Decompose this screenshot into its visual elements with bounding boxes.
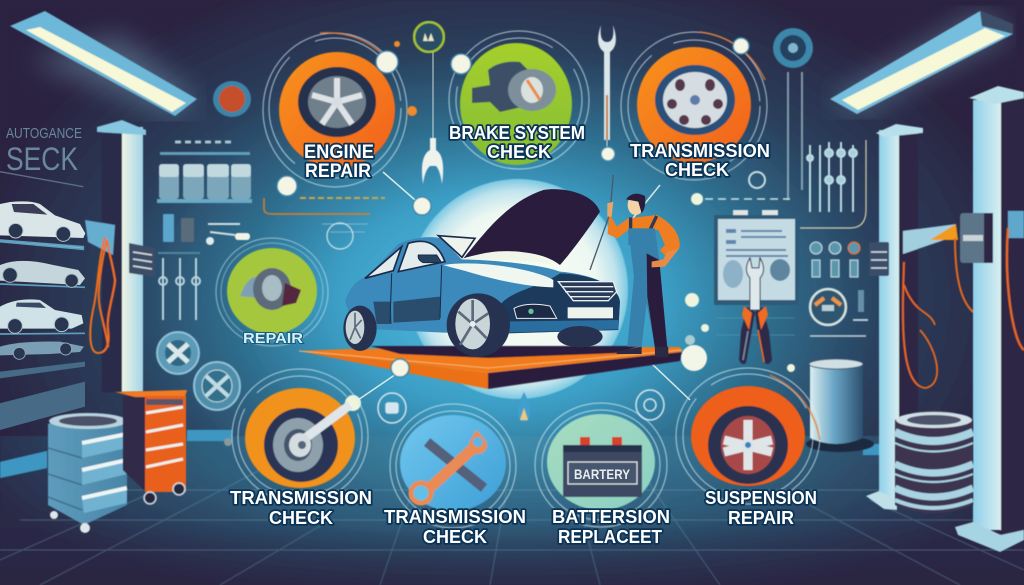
front wheel — [447, 293, 510, 357]
lower left disc and wrench on wheel — [245, 388, 355, 488]
showroom cars rack — [0, 172, 85, 430]
battery rings — [535, 403, 667, 527]
car dark lower body — [497, 273, 620, 333]
lower left rings — [232, 369, 368, 503]
rear wheel — [343, 306, 377, 351]
engine bay — [465, 251, 552, 264]
panel: transmission check top — [621, 32, 770, 180]
right ceiling light — [830, 11, 1013, 114]
brake rings — [449, 31, 589, 169]
mechanic shirt and arms — [608, 213, 680, 257]
brake system label: BRAKE SYSTEM — [449, 123, 585, 143]
engine repair rings — [263, 33, 407, 187]
orbit dots top — [277, 38, 749, 215]
far wheel — [557, 326, 603, 347]
icon: top wrench — [598, 25, 616, 140]
car body — [345, 237, 620, 333]
left lift pillar — [85, 120, 155, 392]
lower middle rings — [390, 404, 516, 528]
connector lines — [355, 42, 690, 402]
lower middle label: TRANSMISSION — [384, 507, 526, 527]
windshield — [438, 236, 475, 257]
rack car 2 — [0, 261, 85, 287]
icon: dark gauge top right — [773, 28, 813, 68]
lower middle label: CHECK — [423, 527, 487, 547]
hanging tools left — [158, 253, 200, 320]
transmission label: CHECK — [665, 160, 729, 180]
wall sign — [6, 125, 82, 177]
mirror and door lines — [390, 255, 442, 323]
platform dots — [224, 293, 795, 446]
repair rings and disc — [216, 238, 328, 346]
battery label: REPLACEET — [558, 527, 662, 547]
panel: transmission check lower middle — [384, 404, 526, 547]
left ceiling light — [10, 11, 197, 116]
engine repair label: REPAIR — [305, 161, 371, 182]
icon: hanging wrench center — [422, 138, 443, 184]
transmission label: TRANSMISSION — [630, 141, 770, 161]
engine repair label — [304, 142, 374, 182]
panel: engine repair — [263, 33, 407, 187]
battery label: BATTERSION — [552, 507, 670, 527]
right lift pillar far — [955, 86, 1024, 552]
mechanic head — [628, 195, 644, 215]
rack car 3 — [0, 299, 83, 333]
suspension label: SUSPENSION — [705, 488, 817, 508]
mechanic figure — [607, 194, 680, 357]
icon: small rings and drop bottom — [378, 390, 664, 423]
battery disc and icon — [547, 414, 655, 510]
dipstick — [590, 175, 613, 270]
transmission disc and wheel — [637, 47, 751, 163]
brake system label — [449, 123, 585, 162]
lift platform — [299, 346, 682, 389]
battery text on icon: BARTERY — [574, 466, 631, 482]
open hood — [463, 189, 600, 265]
rolling blue tool cart — [48, 413, 127, 533]
small wall decorations — [264, 172, 790, 249]
panel: suspension repair — [676, 368, 820, 528]
lower left label — [230, 488, 372, 528]
icon: red gauge left — [213, 81, 251, 117]
grille — [558, 282, 617, 301]
icon: wheel badge left lower — [194, 362, 240, 410]
panel: repair small — [216, 238, 328, 347]
icon: wheel badge left upper — [157, 332, 199, 374]
repair label: REPAIR — [243, 330, 303, 347]
car with open hood — [343, 175, 620, 357]
suspension label — [705, 488, 817, 528]
icon: green ring badge — [414, 22, 444, 52]
engine repair disc and wheel — [279, 52, 395, 168]
right lift pillar near — [866, 124, 958, 510]
wall sign: AUTOGANCE — [6, 125, 82, 142]
lower middle label — [384, 507, 526, 547]
battery label — [552, 507, 670, 547]
lower middle disc and crossed wrenches — [400, 415, 506, 511]
transmission rings — [621, 32, 767, 180]
rack car 4 — [0, 342, 84, 359]
panel: transmission check lower left — [230, 369, 372, 528]
brake disc and caliper — [460, 43, 572, 165]
stacked tyres — [895, 410, 973, 514]
wall sign: SECK — [6, 141, 78, 177]
rack car 1 — [0, 201, 85, 241]
panel: brake system check — [449, 31, 589, 169]
suspension label: REPAIR — [728, 508, 794, 528]
wall shelf with bins — [157, 142, 252, 245]
mechanic hand and boots — [607, 202, 613, 217]
suspension disc and wheel — [691, 386, 805, 486]
bumper light and plate — [514, 304, 557, 318]
suspension rings — [676, 368, 820, 504]
hood highlight — [443, 263, 553, 287]
mechanic overalls — [627, 228, 667, 347]
car service clipboard — [714, 210, 799, 335]
central light burst — [408, 179, 628, 399]
icon: small gauge trio and steering — [810, 242, 868, 336]
brake system label: CHECK — [487, 142, 551, 162]
lower left label: CHECK — [269, 508, 333, 528]
icon: wrench and pliers — [739, 258, 772, 364]
engine repair label: ENGINE — [304, 142, 374, 163]
windows — [365, 241, 445, 278]
lower left label: TRANSMISSION — [230, 488, 372, 508]
panel: battery replacement — [535, 403, 670, 547]
wrench tools rack right — [788, 72, 866, 228]
transmission label — [630, 141, 770, 180]
service barrel — [806, 359, 874, 452]
orange tool cabinet — [115, 390, 187, 504]
